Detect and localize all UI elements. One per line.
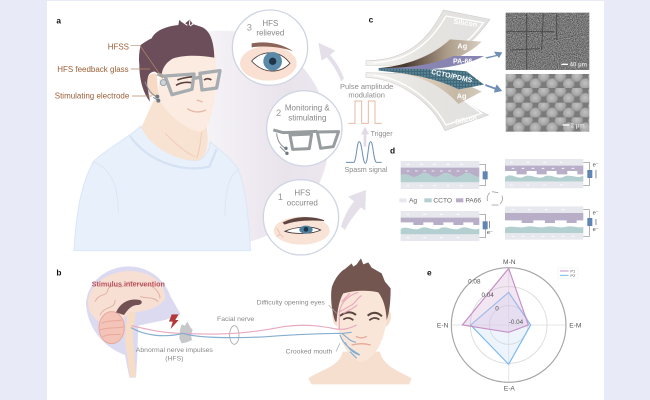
- callout 1: HFS occurred: [263, 180, 339, 255]
- text: occurred: [287, 198, 318, 207]
- brain: [88, 271, 165, 325]
- glasses electrodes: [277, 133, 289, 155]
- leader lines: [329, 305, 340, 352]
- top Ag: [380, 39, 482, 69]
- text: pulse amplitude modulation: Pulse amplitude: [340, 82, 393, 91]
- hair: [139, 19, 214, 102]
- blue nerve: [131, 328, 360, 358]
- hair highlight spikes: [181, 20, 194, 26]
- face: [335, 288, 388, 362]
- state 1: [401, 161, 488, 189]
- legend: CCTO: [433, 197, 452, 204]
- legend: P1: [570, 269, 576, 274]
- eyebrows: [340, 312, 382, 316]
- state 4: [505, 206, 599, 240]
- callout 3: HFS relieved: [232, 10, 308, 85]
- tick 0.04: 0.04: [481, 292, 494, 299]
- axis E-M: E-M: [569, 323, 581, 330]
- face: [157, 50, 216, 132]
- text: HFS: [294, 189, 310, 198]
- text: stimulus intervention: Stimulus intervention: [92, 280, 165, 288]
- relieved eye: [240, 42, 297, 81]
- neck shading lines: [165, 132, 202, 158]
- cerebellum folds: [100, 320, 124, 337]
- text: modulation: [348, 90, 385, 99]
- number 1: 1: [278, 192, 283, 202]
- legend: Ag: [409, 197, 417, 204]
- top silicon inner frame: [373, 16, 483, 63]
- label d: d: [390, 146, 395, 156]
- label HFSS: HFSS: [108, 42, 129, 51]
- axis E-N: E-N: [437, 323, 449, 330]
- text: crooked mouth: Crooked mouth: [286, 349, 333, 356]
- text: difficulty opening eyes: Difficulty opening eyes: [257, 299, 325, 306]
- state 2: [505, 159, 599, 188]
- legend: [558, 268, 578, 279]
- arrow from circle 1 to circle 2: [341, 190, 366, 230]
- arrow to top micrograph: [485, 52, 502, 59]
- label c: c: [369, 14, 374, 24]
- panel b: HFS mechanism: [56, 258, 412, 384]
- pulse waveform: [348, 101, 382, 123]
- arrow to bottom micrograph: [485, 84, 502, 93]
- cerebellum: [99, 312, 124, 344]
- modulation flow: [340, 82, 393, 230]
- panel e: radar chart: [427, 259, 581, 393]
- glasses module: [160, 80, 166, 86]
- annotation leaders: [131, 46, 163, 96]
- abnormal impulse blob: [179, 322, 193, 343]
- legend: [399, 197, 481, 204]
- state 2: e⁻: [593, 163, 599, 169]
- label PA-66: PA-66: [453, 58, 472, 65]
- state 3: e⁻: [487, 230, 493, 236]
- ear: [147, 74, 158, 97]
- neck: [141, 100, 208, 161]
- text: Monitoring &: [285, 104, 330, 113]
- shirt: [74, 126, 251, 251]
- right eye and brow: [203, 71, 213, 80]
- eyes: [343, 318, 379, 320]
- corpus callosum: [116, 299, 142, 315]
- axis M-N: M-N: [503, 259, 516, 266]
- panel c: triboelectric stack and micrographs: [366, 10, 589, 132]
- trigger arrow: [361, 127, 369, 147]
- top silicon: [366, 10, 490, 65]
- collar: [130, 136, 217, 168]
- label b: b: [56, 267, 61, 277]
- brain stem: [125, 312, 136, 377]
- pink nerve: [132, 292, 362, 334]
- bottom Ag: [393, 71, 482, 104]
- number 2: 2: [276, 108, 281, 118]
- radar grid: [451, 268, 566, 382]
- label HFS feedback glass: HFS feedback glass: [57, 65, 129, 74]
- electrodes and wire: [145, 82, 160, 103]
- axis E-A: E-A: [504, 386, 515, 393]
- ears: [332, 310, 391, 327]
- person: [74, 19, 251, 251]
- label silicon bottom: Silicon: [455, 115, 477, 126]
- text: spasm signal: Spasm signal: [345, 166, 388, 174]
- label Ag top: Ag: [457, 42, 467, 51]
- series P1: [462, 268, 528, 332]
- glasses illustration: [273, 130, 339, 149]
- lightning icon: [169, 314, 179, 329]
- text: facial nerve: Facial nerve: [217, 316, 254, 323]
- text: trigger: Trigger: [371, 131, 393, 138]
- scale bar: [563, 124, 569, 126]
- scale bar: [561, 64, 568, 65]
- bottom silicon: [366, 73, 488, 131]
- top PA-66: [379, 56, 484, 71]
- top SEM micrograph: [506, 13, 589, 70]
- scale text: 2 μm: [571, 123, 585, 129]
- portrait: [308, 258, 412, 384]
- arrow from circle 2 to circle 3: [318, 43, 344, 82]
- head silhouette: [86, 266, 181, 378]
- scale text: 40 μm: [570, 63, 587, 69]
- panel a: HFS feedback glass wearer: [55, 10, 344, 255]
- text: abnormal nerve impulses: Abnormal nerve impulses: [136, 347, 213, 354]
- label CCTO/PDMS: CCTO/PDMS: [430, 69, 473, 85]
- label Ag bottom: Ag: [457, 92, 467, 101]
- series P2: [471, 292, 531, 364]
- background disk: [115, 31, 329, 245]
- bottom silicon inner frame: [373, 75, 482, 125]
- tick 0: 0: [495, 306, 499, 313]
- winking eye and brow: [176, 77, 193, 85]
- text: relieved: [256, 29, 284, 38]
- label a: a: [56, 15, 61, 25]
- tick 0.08: 0.08: [468, 279, 481, 286]
- neck and shoulders: [308, 352, 412, 384]
- twitching eye: [274, 217, 330, 245]
- number 3: 3: [247, 23, 252, 33]
- nose and mouth: [187, 100, 206, 112]
- text: HFS: [262, 19, 278, 28]
- brain gyri: [95, 282, 160, 315]
- glasses: [157, 71, 220, 95]
- text: stimulating: [288, 113, 326, 122]
- state 4: e⁻: [593, 210, 599, 216]
- tick -0.04: -0.04: [509, 319, 524, 326]
- state 4: e⁻: [593, 227, 599, 233]
- hair: [331, 258, 391, 322]
- legend: P2: [570, 273, 576, 278]
- bottom SEM micrograph: [506, 74, 589, 132]
- label e: e: [427, 268, 432, 278]
- nose and mouth: [352, 336, 371, 345]
- shirt sleeve seam: [93, 162, 238, 217]
- label stimulating electrode: Stimulating electrode: [55, 92, 130, 101]
- cycle arrows: [487, 192, 503, 205]
- facial nerve ellipse: [230, 326, 239, 344]
- CCTO/PDMS: [379, 68, 484, 89]
- panel d: working mechanism: [390, 146, 599, 241]
- legend: PA66: [465, 197, 481, 204]
- spasm signal waveform: [346, 142, 382, 163]
- state 3: [401, 211, 493, 241]
- label silicon top: Silicon: [453, 17, 478, 29]
- callout 2: monitoring and stimulating: [267, 91, 342, 166]
- text: HFS: (HFS): [165, 355, 183, 362]
